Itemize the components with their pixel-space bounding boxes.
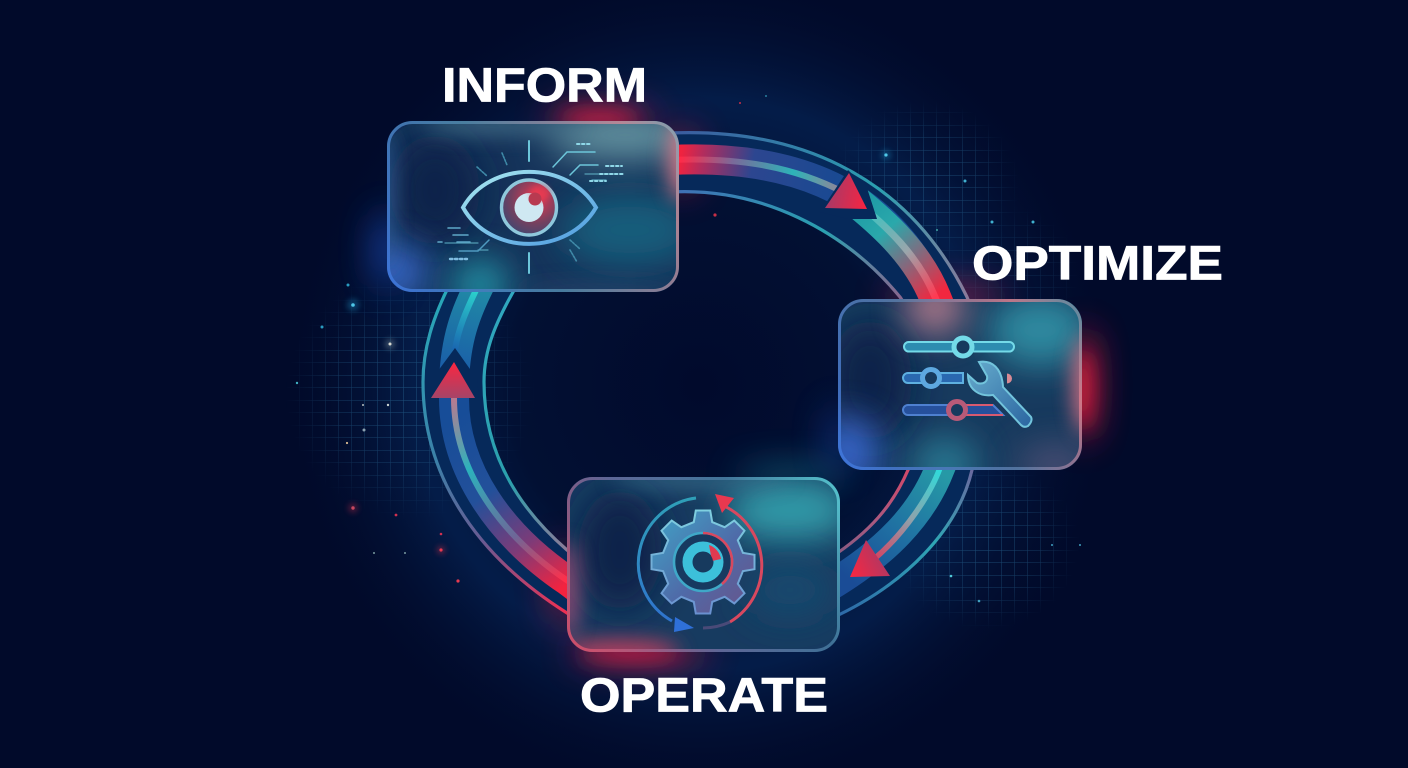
label: operate: OPERATE — [580, 670, 828, 722]
panel: inform — [387, 121, 679, 292]
icon: gear with cycle arrows — [638, 494, 762, 632]
background particles — [296, 95, 1081, 602]
arc: inform to optimize — [670, 133, 975, 312]
panel: operate — [567, 477, 840, 652]
arc: optimize to operate — [828, 456, 976, 619]
ring glows — [377, 110, 1093, 661]
arc: operate to inform — [423, 280, 580, 621]
panel: optimize — [838, 299, 1082, 470]
arrow: optimize to operate — [850, 540, 890, 577]
background — [293, 34, 1074, 736]
arrow: inform to optimize — [825, 173, 867, 209]
label: optimize: OPTIMIZE — [972, 238, 1223, 290]
arrow: operate to inform — [431, 362, 475, 398]
icon: sliders and wrench — [903, 338, 1032, 427]
label: inform: INFORM — [442, 60, 647, 112]
icon: eye — [438, 141, 623, 273]
